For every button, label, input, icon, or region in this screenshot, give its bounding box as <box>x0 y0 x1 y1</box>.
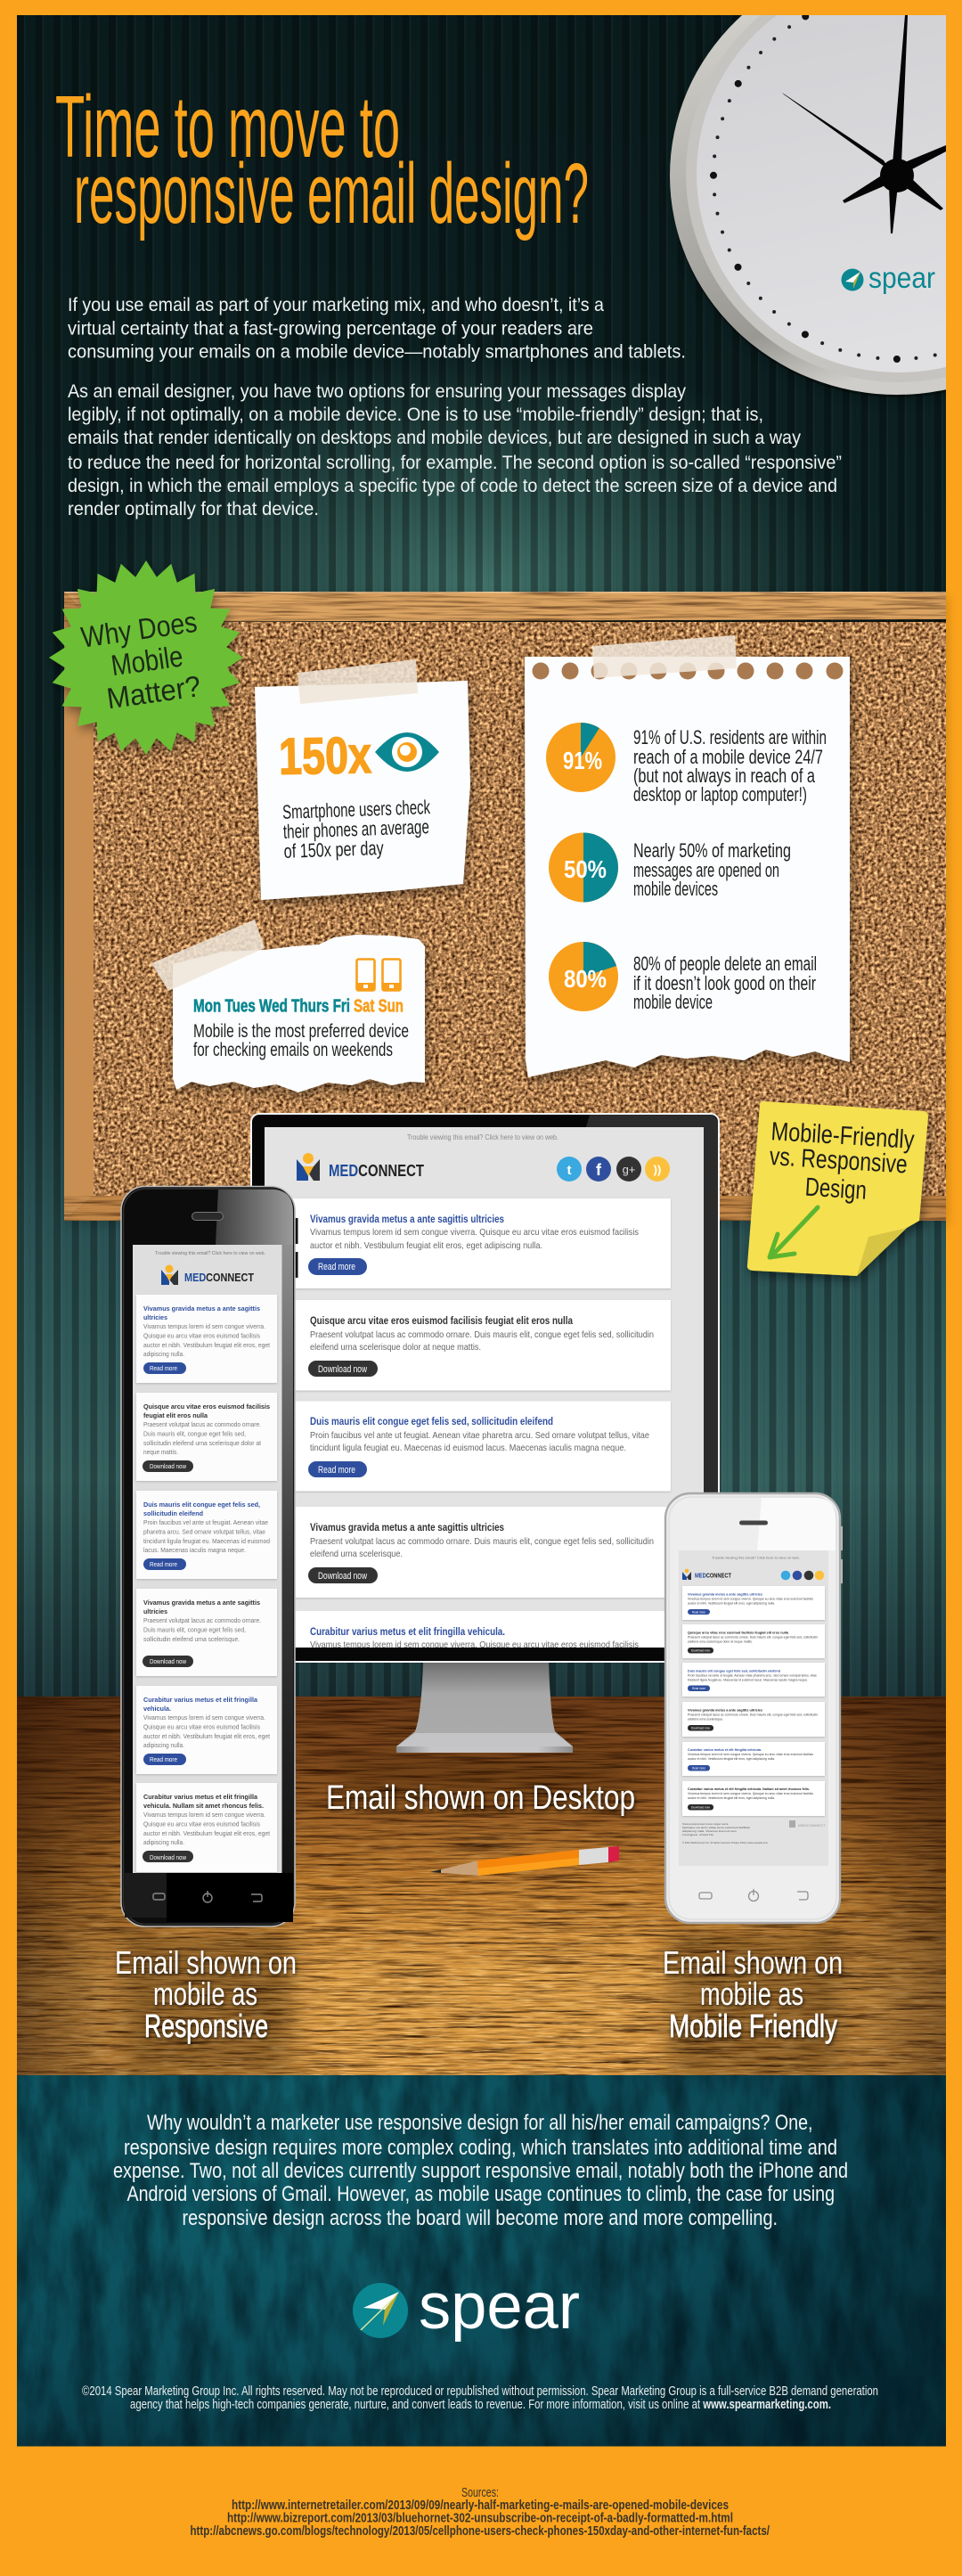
phone screen <box>133 1245 281 1873</box>
glass glare <box>757 1498 836 1550</box>
logo: medconnect <box>161 1265 254 1285</box>
mobile card 1: Vivamus gravida metus a ante sagittis <box>143 1304 260 1313</box>
mobile card 3: sollicitudin eleifend <box>143 1509 203 1517</box>
white phone card 2: eleifend urna scelerisque dolor at neque mattis. <box>688 1640 753 1643</box>
trouble viewing line: Trouble viewing this email? Click here to view on web. <box>407 1133 558 1141</box>
mobile card 1: Vivamus tempus lorem id sem congue viverra. <box>143 1324 265 1330</box>
phone screen <box>679 1550 828 1866</box>
page curl <box>857 1228 907 1276</box>
pie: 80% <box>549 942 618 1011</box>
email footer: © 2014 MedConnect Inc. All rights reserved. Privacy Policy www.example.com <box>682 1841 768 1844</box>
stat text: 91%: (but not always in reach of a <box>633 765 816 787</box>
white phone card 4: Vivamus gravida metus a ante sagittis ultricies <box>688 1707 762 1713</box>
caption: shown on mobile as mobile friendly: Mobile Friendly <box>669 2008 837 2044</box>
white phone card 1: Vivamus gravida metus a ante sagittis ultricies <box>688 1591 762 1597</box>
intro paragraph 2: As an email designer, you have two options for ensuring your messages display <box>68 381 686 402</box>
white phone card 1 <box>682 1586 825 1620</box>
stat text: 80%: 80% of people delete an email <box>633 953 817 975</box>
sticky text: vs. Responsive <box>769 1142 909 1179</box>
email card 4: eleifend urna scelerisque. <box>310 1549 403 1559</box>
email card 4 <box>289 1507 671 1598</box>
mobile card 6: Vivamus tempus lorem id sem congue viverra. <box>143 1812 265 1819</box>
mobile card 2: neque mattis. <box>143 1450 178 1456</box>
email card 3: Read more <box>318 1465 355 1476</box>
mobile card 6: Download now <box>150 1855 187 1861</box>
sources: http://www.bizreport.com/2013/03/bluehornet-302-unsubscribe-on-receipt-of-a-badly-formatted-m.html <box>227 2511 733 2525</box>
clock <box>670 0 962 397</box>
intro paragraph 2: design, in which the email employs a specific type of code to detect the screen size of a device and <box>68 476 837 496</box>
glass glare <box>216 1190 293 1245</box>
wooden frame <box>64 592 946 1221</box>
pie: 91% <box>546 723 616 792</box>
email card 3: tincidunt ligula feugiat eu. Maecenas id euismod lacus. Maecenas iaculis magna neque. <box>310 1443 626 1453</box>
mobile card 4: Download now <box>150 1659 187 1665</box>
logo: medconnect: MEDCONNECT <box>184 1271 254 1284</box>
white phone card 6: Vivamus tempus lorem id sem congue viverra. Quisque eu arcu vitae eros euismod facilisis <box>688 1792 813 1795</box>
email card 1: Vivamus tempus lorem id sem congue viverra. Quisque eu arcu vitae eros euismod facilisis <box>310 1227 639 1238</box>
white phone card 5 <box>682 1742 825 1776</box>
trouble viewing line: Trouble viewing this email? Click here to view on web. <box>712 1556 800 1559</box>
intro paragraph 2 <box>68 381 842 519</box>
social icons: f <box>596 1161 602 1179</box>
speaker <box>739 1520 768 1525</box>
stat text: 50%: Nearly 50% of marketing <box>633 839 791 862</box>
clock hands <box>782 15 946 233</box>
note text <box>282 796 433 863</box>
white phone card 6: auctor et nibh. Vestibulum feugiat elit eros, eget adipiscing nulla. <box>688 1796 775 1800</box>
white phone card 1: auctor et nibh. Vestibulum feugiat elit eros, eget adipiscing nulla. <box>688 1602 775 1606</box>
mobile card 5: adipiscing nulla. <box>143 1743 184 1749</box>
starburst: why does mobile matter: Why Does <box>79 605 199 654</box>
starburst: why does mobile matter: Mobile <box>109 639 185 682</box>
email card 4: Download now <box>318 1571 367 1582</box>
mobile card 5: Read more <box>150 1757 177 1763</box>
shadows on desk <box>125 1929 294 2081</box>
sources: http://abcnews.go.com/blogs/technology/2013/05/cellphone-users-check-phones-150xday-and-other-internet-fun-facts/ <box>191 2524 770 2539</box>
email card 1: Vivamus gravida metus a ante sagittis ultricies <box>310 1214 504 1225</box>
email card 4: Vivamus gravida metus a ante sagittis ultricies <box>310 1523 504 1533</box>
white phone card 1: Read more <box>692 1611 705 1615</box>
title: Time to move to <box>55 78 400 176</box>
stat text: 50%: mobile devices <box>633 878 718 900</box>
white phone card 6: Download now <box>691 1805 711 1809</box>
intro paragraph 1: consuming your emails on a mobile device—notably smartphones and tablets. <box>68 342 686 362</box>
mobile card 4 <box>136 1589 277 1676</box>
social icons: t <box>567 1163 572 1178</box>
pencil <box>430 1846 619 1876</box>
logo: medconnect: MEDCONNECT <box>329 1162 424 1180</box>
note: 150x per day <box>255 659 470 900</box>
mobile card 6: auctor et nibh. Vestibulum feugiat elit eros, eget <box>143 1831 270 1837</box>
sources: http://www.internetretailer.com/2013/09/09/nearly-half-marketing-e-mails-are-opened-mobile-devices <box>232 2498 729 2513</box>
sticky text: Mobile-Friendly <box>770 1117 916 1155</box>
white phone card 6 <box>682 1781 825 1816</box>
email card 5: Curabitur varius metus et elit fringilla vehicula. <box>310 1627 505 1638</box>
email card 1: auctor et nibh. Vestibulum feugiat elit eros, eget adipiscing nulla. <box>310 1240 542 1251</box>
white phone card 4: eleifend urna scelerisque. <box>688 1718 723 1721</box>
mobile card 1: Quisque eu arcu vitae eros euismod facilisis <box>143 1333 260 1340</box>
white phone card 3: Proin faucibus vel ante ut feugiat. Aenean vitae pharetra arcu. Sed ornare volutpat tellus, vitae <box>688 1673 817 1677</box>
days of the week: Sat Sun <box>354 996 404 1016</box>
weekend text <box>193 1021 409 1060</box>
stat text: 80% <box>633 953 817 1013</box>
white phone card 2: Download now <box>691 1648 711 1652</box>
white phone card 3 <box>682 1663 825 1697</box>
white phone card 4 <box>682 1702 825 1737</box>
phone nav buttons <box>699 1889 808 1901</box>
icon: eye <box>375 732 439 772</box>
email card 1: Read more <box>318 1262 355 1272</box>
white phone card 6: Curabitur varius metus et elit fringilla vehicula. Nullam sit amet rhoncus felis. <box>688 1787 810 1791</box>
mobile card 1: auctor et nibh. Vestibulum feugiat elit eros, eget <box>143 1343 270 1349</box>
mobile card 5 <box>136 1686 277 1774</box>
email card 5 <box>296 1611 664 1648</box>
white phone card 4: Praesent volutpat lacus ac commodo ornare. Duis mauris elit, congue eget felis sed, sollicitudin <box>688 1713 818 1716</box>
email card 5: Vivamus tempus lorem id sem congue viverra. Quisque eu arcu vitae eros euismod facilisis <box>310 1640 639 1650</box>
logo: medconnect <box>682 1569 732 1580</box>
arrow: green <box>770 1207 818 1257</box>
mobile card 6: Curabitur varius metus et elit fringilla <box>143 1793 258 1801</box>
white phone card 3: Read more <box>692 1687 705 1690</box>
sources <box>191 2486 770 2539</box>
stat text: 80%: mobile device <box>633 991 713 1013</box>
email footer <box>682 1820 827 1844</box>
phone nav buttons <box>153 1891 262 1902</box>
mobile card 5: Quisque eu arcu vitae eros euismod facilisis <box>143 1725 260 1730</box>
mobile card 2: Praesent volutpat lacus ac commodo ornare. <box>143 1422 261 1428</box>
email card 3 <box>289 1401 671 1492</box>
stat text: 50% <box>633 839 791 900</box>
caption: shown on mobile as responsive: mobile as <box>153 1975 257 2012</box>
email card 4: Praesent volutpat lacus ac commodo ornare. Duis mauris elit, congue eget felis sed, sollicitudin <box>310 1536 654 1547</box>
closing paragraph: Why wouldn’t a marketer use responsive design for all his/her email campaigns? One, <box>147 2111 812 2135</box>
stat text: 91% <box>633 726 827 806</box>
mobile card 3 <box>136 1491 277 1579</box>
mobile card 2 <box>136 1393 277 1481</box>
social icons: )) <box>654 1163 661 1176</box>
starburst: why does mobile matter: Matter? <box>104 669 203 715</box>
pie: 50% <box>549 832 618 902</box>
logo: medconnect <box>297 1153 424 1181</box>
mobile card 4: Praesent volutpat lacus ac commodo ornare. <box>143 1618 261 1624</box>
mobile card 2: sollicitudin eleifend urna scelerisque dolor at <box>143 1441 261 1447</box>
intro paragraph 1: If you use email as part of your marketing mix, and who doesn’t, it’s a <box>68 295 604 315</box>
copyright <box>82 2384 878 2412</box>
email card 2: eleifend urna scelerisque dolor at neque mattis. <box>310 1342 481 1353</box>
sticky text <box>767 1117 916 1208</box>
white phone card 2 <box>682 1624 825 1658</box>
mobile card 2: Duis mauris elit, congue eget felis sed, <box>143 1431 246 1438</box>
cork board <box>64 592 946 1221</box>
weekend text: Mobile is the most preferred device <box>193 1021 409 1042</box>
spear logo on clock: spear <box>868 261 935 294</box>
caption: email shown on desktop: Email shown on Desktop <box>326 1779 635 1817</box>
mobile card 1: ultricies <box>143 1313 167 1321</box>
weekend text: for checking emails on weekends <box>193 1040 393 1060</box>
striped wallpaper background <box>17 15 946 1697</box>
intro paragraph 2: legibly, if not optimally, on a mobile device. One is to use “mobile-friendly” design; that is, <box>68 405 763 425</box>
logo: medconnect: MEDCONNECT <box>695 1574 732 1579</box>
tape <box>298 659 418 704</box>
email card 1 <box>289 1198 671 1288</box>
pie: 50%: 50% <box>564 855 607 883</box>
mobile card 4: Duis mauris elit, congue eget felis sed, <box>143 1627 246 1634</box>
tape <box>592 635 737 678</box>
stat text: 50%: messages are opened on <box>633 859 779 881</box>
black phone: responsive email <box>121 1187 298 1926</box>
white phone card 3: tincidunt ligula feugiat eu. Maecenas id euismod lacus. Maecenas iaculis magna neque. <box>688 1679 808 1682</box>
caption: shown on mobile as mobile friendly <box>663 1944 843 2044</box>
sticky note: mobile-friendly vs responsive <box>747 1101 928 1276</box>
intro paragraph 1 <box>68 295 686 362</box>
caption: shown on mobile as mobile friendly: Email shown on <box>663 1944 843 1981</box>
intro paragraph 2: to reduce the need for horizontal scrolling, for example. The second option is so-called “responsive” <box>68 453 842 473</box>
monitor with desktop email <box>250 1113 720 1664</box>
mobile card 2: feugiat elit eros nulla <box>143 1411 208 1419</box>
mobile card 2: Download now <box>150 1464 187 1470</box>
email footer: congue viverra. <box>682 1833 714 1836</box>
email footer: Vivamus tempus lorem id sem congue viverra. <box>682 1822 729 1826</box>
white phone card 2: Quisque arcu vitae eros euismod facilisis feugiat elit eros nulla <box>688 1631 789 1634</box>
monitor stand <box>396 1663 573 1753</box>
mobile card 3: Read more <box>150 1562 177 1568</box>
mobile card 1 <box>136 1295 277 1383</box>
speaker <box>192 1212 223 1221</box>
caption: shown on mobile as responsive: Email shown on <box>115 1944 297 1981</box>
mobile card 4: ultricies <box>143 1607 167 1615</box>
email footer: adipiscing nulla. Vivamus lorem id sem <box>682 1829 738 1833</box>
spear logo on clock <box>841 269 935 294</box>
pie: 80%: 80% <box>564 965 607 993</box>
white phone card 2: Praesent volutpat lacus ac commodo ornare. Duis mauris elit, congue eget felis sed, sollicitudin <box>688 1636 818 1640</box>
sticky text: Design <box>804 1174 868 1206</box>
bottom teal panel <box>17 2075 946 2447</box>
note text: Smartphone users check <box>282 796 431 823</box>
mobile card 3: Proin faucibus vel ante ut feugiat. Aenean vitae <box>143 1520 268 1526</box>
email card 2: Praesent volutpat lacus ac commodo ornare. Duis mauris elit, congue eget felis sed, sollicitudin <box>310 1329 654 1340</box>
mobile card 5: auctor et nibh. Vestibulum feugiat elit eros, eget <box>143 1734 270 1740</box>
white phone: mobile friendly email <box>665 1493 843 1923</box>
tape <box>151 920 265 991</box>
pie: 91%: 91% <box>563 747 602 774</box>
social icons <box>781 1571 824 1580</box>
note: weekends <box>151 920 425 1092</box>
mobile card 3: tincidunt ligula feugiat eu. Maecenas id euismod <box>143 1539 270 1545</box>
mobile card 5: Vivamus tempus lorem id sem congue viverra. <box>143 1715 265 1721</box>
closing paragraph <box>113 2111 848 2230</box>
caption: shown on mobile as responsive: Responsive <box>144 2008 268 2044</box>
mobile card 5: Curabitur varius metus et elit fringilla <box>143 1696 258 1704</box>
mobile card 3: lacus. Maecenas iaculis magna neque. <box>143 1548 246 1554</box>
white phone card 3: Duis mauris elit congue eget felis sed, sollicitudin eleifend <box>688 1668 781 1673</box>
mobile card 3: pharetra arcu. Sed ornare volutpat tellus, vitae <box>143 1529 265 1536</box>
white phone card 5: auctor et nibh. Vestibulum feugiat elit eros, eget adipiscing nulla. <box>688 1757 775 1761</box>
email card 2: Download now <box>318 1364 367 1375</box>
intro paragraph 2: render optimally for that device. <box>68 499 319 519</box>
mobile card 6: Quisque eu arcu vitae eros euismod facilisis <box>143 1821 260 1828</box>
title <box>55 78 589 241</box>
note text: their phones an average <box>282 815 429 843</box>
stat text: 91%: 91% of U.S. residents are within <box>633 726 827 748</box>
mobile card 3: Duis mauris elit congue eget felis sed, <box>143 1501 260 1509</box>
social icons <box>557 1157 670 1182</box>
closing paragraph: responsive design across the board will become more and more compelling. <box>182 2206 778 2230</box>
mobile card 4: sollicitudin eleifend urna scelerisque. <box>143 1637 240 1643</box>
mobile card 6: adipiscing nulla. <box>143 1840 184 1846</box>
mobile card 1: Read more <box>150 1366 177 1372</box>
caption: shown on mobile as responsive <box>115 1944 297 2044</box>
sources: Sources: <box>461 2486 499 2500</box>
mobile card 6 <box>136 1783 277 1872</box>
icon: phones <box>356 959 401 991</box>
spiral holes <box>533 663 843 679</box>
white phone card 5: Read more <box>692 1766 705 1770</box>
big 150x: 150x <box>278 726 372 786</box>
spear logo: spear <box>419 2270 580 2343</box>
wood desk <box>17 1697 946 2081</box>
white phone card 5: Curabitur varius metus et elit fringilla vehicula. <box>688 1747 762 1752</box>
stat text: 80%: if it doesn’t look good on their <box>633 972 816 994</box>
mobile card 6: vehicula. Nullam sit amet rhoncus felis. <box>143 1802 264 1810</box>
social icons: g+ <box>623 1163 635 1176</box>
copyright: agency that helps high-tech companies generate, nurture, and convert leads to revenue. For more information, visit us online at www.spearmarketing.com. <box>130 2398 831 2412</box>
intro paragraph 1: virtual certainty that a fast-growing percentage of your readers are <box>68 319 593 339</box>
mobile card 1: adipiscing nulla. <box>143 1352 184 1358</box>
stat text: 91%: desktop or laptop computer!) <box>633 783 807 806</box>
trouble viewing line: Trouble viewing this email? Click here to view on web. <box>155 1251 265 1256</box>
mobile card 2: Quisque arcu vitae eros euismod facilisis <box>143 1402 270 1411</box>
white phone card 5: Vivamus tempus lorem id sem congue viverra. Quisque eu arcu vitae eros euismod facilisis <box>688 1753 813 1756</box>
mobile card 5: vehicula. <box>143 1705 171 1713</box>
closing paragraph: responsive design requires more complex coding, which translates into additional time and <box>124 2136 837 2160</box>
email footer: Quisque eu arcu vitae eros euismod facilisis <box>682 1826 751 1829</box>
email card 3: Duis mauris elit congue eget felis sed, sollicitudin eleifend <box>310 1417 553 1427</box>
caption: shown on mobile as mobile friendly: mobile as <box>700 1975 803 2012</box>
email footer: MEDCONNECT <box>798 1824 827 1828</box>
white phone card 4: Download now <box>691 1727 711 1730</box>
mobile card 4: Vivamus gravida metus a ante sagittis <box>143 1599 260 1607</box>
note: statistics <box>525 635 850 1077</box>
stat text: 91%: reach of a mobile device 24/7 <box>633 746 823 768</box>
days of the week: Mon Tues Wed Thurs Fri <box>193 996 350 1016</box>
email card 2: Quisque arcu vitae eros euismod facilisis feugiat elit eros nulla <box>310 1316 574 1327</box>
starburst: why does mobile matter <box>49 560 243 755</box>
email card 2 <box>289 1300 671 1390</box>
email card 3: Proin faucibus vel ante ut feugiat. Aenean vitae pharetra arcu. Sed ornare volutpat tellus, vitae <box>310 1430 649 1441</box>
white phone card 1: Vivamus tempus lorem id sem congue viverra. Quisque eu arcu vitae eros euismod facilisis <box>688 1597 813 1600</box>
intro paragraph 2: emails that render identically on desktops and mobile devices, but are designed in such a way <box>68 428 801 448</box>
note text: of 150x per day <box>283 837 384 863</box>
